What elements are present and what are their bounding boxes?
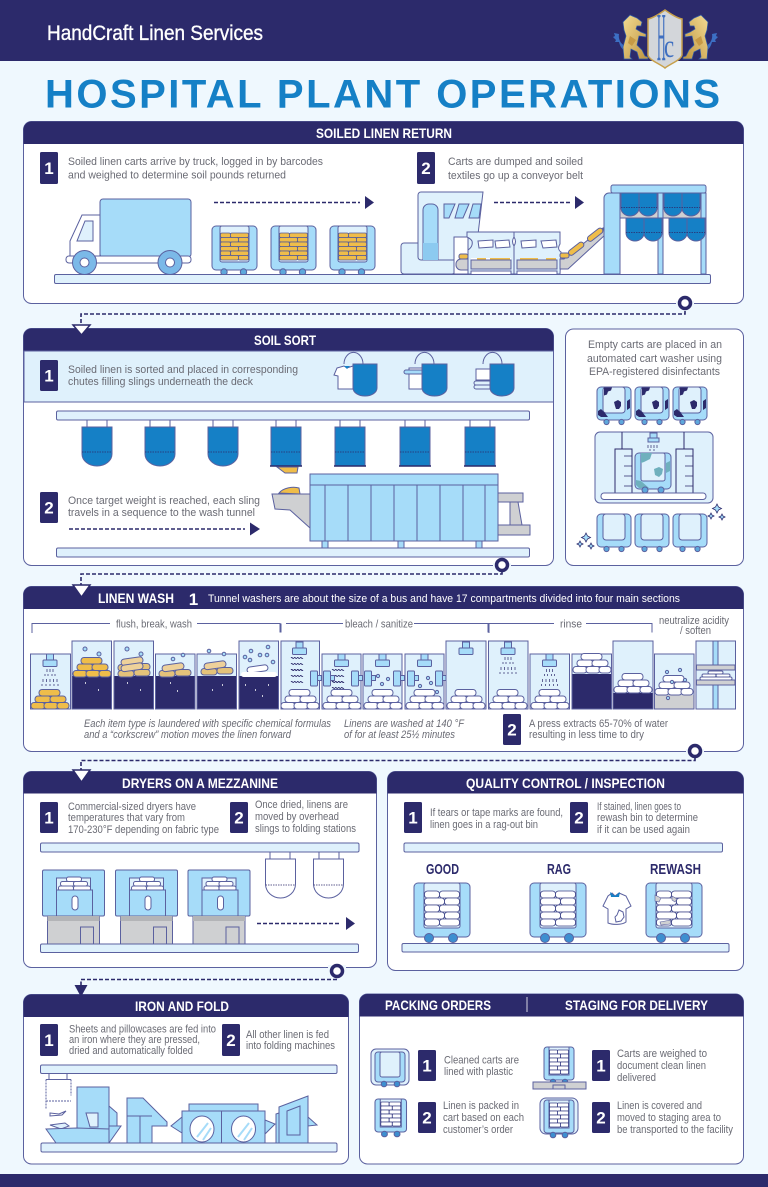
icon: cart washing machine	[595, 432, 713, 503]
step 1	[40, 152, 323, 184]
step 1: 1	[408, 808, 418, 828]
overhead rail	[40, 843, 359, 852]
description: EPA-registered disinfectants	[589, 366, 720, 378]
step 2: All other linen is fed	[246, 1029, 329, 1041]
staging step 2	[592, 1100, 733, 1136]
panel heading: 1	[189, 590, 198, 609]
footer band	[0, 1174, 768, 1187]
step 2: moved by overhead	[255, 811, 339, 823]
panel: dryers on a mezzanine	[24, 772, 376, 968]
panel: soil sort	[24, 328, 554, 566]
icon: soiled carts	[212, 226, 375, 275]
icon: sling with towel	[404, 352, 447, 396]
icon: lined cart	[371, 1049, 409, 1087]
icon: covered cart	[540, 1098, 578, 1138]
arrowhead into soil sort	[73, 325, 90, 335]
step 1: an iron where they are pressed,	[69, 1034, 200, 1046]
header band	[0, 0, 768, 61]
panel: iron and fold	[24, 994, 348, 1164]
icon: stained shirt	[603, 892, 631, 924]
arrowhead into iron and fold	[74, 985, 88, 997]
falling linen	[277, 467, 298, 473]
panel heading: DRYERS ON A MEZZANINE	[122, 775, 278, 791]
floor rail	[56, 548, 530, 557]
step 2: into folding machines	[246, 1040, 335, 1052]
icon: clean carts	[597, 514, 707, 552]
wash compartments: rinse	[488, 641, 653, 709]
step 1: and weighed to determine soil pounds returned	[68, 170, 286, 182]
icon: packed cart	[375, 1099, 406, 1137]
step 1: linen goes in a rag-out bin	[430, 819, 538, 831]
step 2: 2	[574, 808, 584, 828]
step 1 band: Soiled linen is sorted and placed in corresponding	[68, 364, 298, 376]
panel heading	[24, 586, 744, 609]
icon: sparkles	[577, 504, 725, 549]
floor rail	[402, 944, 729, 952]
icon: dirty carts	[597, 387, 707, 425]
panel heading: STAGING FOR DELIVERY	[565, 997, 709, 1013]
panel heading: SOILED LINEN RETURN	[316, 125, 452, 141]
icon: sling with shirt	[334, 352, 377, 396]
overhead rail	[404, 843, 722, 852]
logo: lions and crest: H	[657, 0, 666, 75]
icon: stacker	[276, 1096, 317, 1143]
panel heading	[24, 328, 554, 351]
connector: dryers to iron and fold	[81, 965, 346, 985]
panel: soiled linen return	[24, 122, 744, 304]
wash compartments: bleach, sanitize	[281, 641, 486, 709]
staging step 2: 2	[596, 1108, 606, 1128]
caption: formulas: and a “corkscrew” motion moves the linen forward	[84, 729, 292, 741]
panel: cart washer	[566, 329, 744, 566]
caption: formulas: Each item type is laundered with specific chemical formulas	[84, 718, 331, 730]
cart: rag	[530, 861, 586, 942]
step 2	[230, 799, 356, 835]
step 1: temperatures that vary from	[68, 812, 185, 824]
step 2	[222, 1024, 335, 1056]
panel heading	[24, 994, 348, 1017]
staging step 1: document clean linen	[617, 1060, 706, 1072]
staging step 2: moved to staging area to	[617, 1112, 721, 1124]
icon: ironer	[46, 1087, 121, 1143]
description: automated cart washer using	[587, 353, 722, 365]
step 1: Commercial-sized dryers have	[68, 801, 196, 813]
step 1 band: chutes filling slings underneath the deck	[68, 376, 253, 388]
icon: truck	[66, 199, 191, 274]
panel heading: Tunnel washers are about the size of a bus and have 17 compartments divided into four main sections	[208, 593, 680, 605]
step 2: rewash bin to determine	[597, 812, 698, 824]
brand name: HandCraft Linen Services	[47, 22, 263, 45]
panel heading: IRON AND FOLD	[135, 998, 229, 1014]
cart: good	[414, 861, 470, 942]
step 2: travels in a sequence to the wash tunnel	[68, 507, 255, 519]
panel heading	[24, 122, 744, 144]
packing step 2: 2	[422, 1108, 432, 1128]
hanging slings	[82, 420, 496, 466]
staging step 1: 1	[596, 1056, 606, 1076]
step 1	[404, 802, 563, 833]
staging step 2: be transported to the facility	[617, 1124, 733, 1136]
step 2: press	[503, 714, 668, 745]
panel: packing and staging	[360, 994, 744, 1164]
step 2: press: A press extracts 65-70% of water	[529, 718, 668, 730]
packing step 1: 1	[422, 1056, 432, 1076]
connector: soil sort to linen wash	[81, 560, 511, 586]
panel heading: PACKING ORDERS	[385, 997, 491, 1013]
connector: step 1 to soil sort	[81, 298, 694, 324]
caption: temperature: Linens are washed at 140 °F	[344, 718, 465, 730]
cart: rag: RAG	[547, 861, 571, 878]
staging step 1	[592, 1048, 707, 1084]
arrow	[494, 196, 584, 209]
packing step 1	[418, 1050, 519, 1081]
step 1: dried and automatically folded	[69, 1045, 193, 1057]
ground conveyor bar	[54, 274, 710, 284]
caption: temperature	[344, 718, 465, 741]
packing step 2: cart based on each	[443, 1112, 524, 1124]
step 2: textiles go up a conveyor belt	[448, 170, 583, 182]
section brackets: bleach / sanitize	[345, 618, 413, 630]
step 1 band	[24, 351, 554, 402]
description	[587, 339, 722, 378]
step 2: Once target weight is reached, each sling	[68, 495, 260, 507]
wash tunnel	[272, 474, 530, 548]
wash compartments: flush, break, wash	[30, 641, 278, 709]
title: HOSPITAL PLANT OPERATIONS	[45, 72, 720, 116]
step 2: 2	[234, 808, 244, 828]
step 1	[40, 801, 219, 836]
dumper and conveyor machine	[401, 192, 605, 274]
panel heading	[388, 772, 744, 794]
connector: linen wash to dryers	[81, 746, 704, 770]
icon: cart on scale	[533, 1047, 586, 1089]
step 2	[417, 152, 583, 184]
logo: lions and crest	[613, 0, 718, 75]
packing step 1: Cleaned carts are	[444, 1054, 519, 1066]
overhead rail	[40, 1065, 337, 1074]
floor rail	[40, 944, 358, 952]
cart: rewash	[646, 861, 702, 942]
cart: good: GOOD	[426, 861, 459, 878]
icon: folder with windows	[171, 1104, 275, 1143]
packing step 1: lined with plastic	[444, 1066, 513, 1078]
arrow	[214, 196, 374, 209]
step 2: press: resulting in less time to dry	[529, 729, 644, 741]
step 2: slings to folding stations	[255, 823, 356, 835]
step 1: Sheets and pillowcases are fed into	[69, 1024, 216, 1036]
logo: lions and crest: c	[664, 29, 674, 65]
step 2: press: 2	[507, 720, 517, 740]
staging step 1: Carts are weighed to	[617, 1048, 707, 1060]
step 2: Carts are dumped and soiled	[448, 156, 583, 168]
section brackets: flush, break, wash	[116, 618, 192, 630]
staging step 1: delivered	[617, 1072, 656, 1084]
staging step 2: Linen is covered and	[617, 1100, 702, 1112]
dryers	[42, 870, 250, 944]
step 1 band: 1	[44, 366, 54, 386]
icon: sling over ironer	[46, 1074, 71, 1129]
step 1: 1	[44, 159, 54, 178]
caption: temperature: of for at least 25½ minutes	[344, 729, 455, 741]
icon: overhead sling rack	[604, 185, 706, 274]
step 2: If stained, linen goes to	[597, 801, 681, 813]
packing step 2: Linen is packed in	[443, 1100, 519, 1112]
description: Empty carts are placed in an	[588, 339, 722, 351]
section brackets: neutralize acidity	[659, 615, 729, 627]
step 1	[40, 1024, 216, 1057]
arrow	[257, 917, 355, 930]
panel: linen wash	[24, 586, 744, 752]
overhead rail	[56, 411, 530, 420]
packing step 2: customer’s order	[443, 1124, 513, 1136]
step 1: 1	[44, 808, 54, 828]
caption: formulas	[84, 718, 331, 741]
cart: rewash: REWASH	[650, 861, 701, 878]
step 2: 2	[421, 159, 431, 178]
icon: folding machine	[127, 1098, 167, 1143]
floor rail	[41, 1143, 337, 1152]
step 2	[40, 492, 260, 523]
step 1: 1	[44, 1031, 54, 1050]
wash compartments: neutralize, press	[654, 641, 736, 709]
step 2: Once dried, linens are	[255, 799, 348, 811]
panel heading: LINEN WASH	[98, 590, 174, 606]
panel heading	[24, 772, 376, 794]
step 1: If tears or tape marks are found,	[430, 807, 563, 819]
empty slings	[266, 852, 344, 898]
panel heading	[360, 994, 744, 1016]
panel heading: QUALITY CONTROL / INSPECTION	[466, 775, 665, 791]
arrow	[69, 522, 260, 536]
section brackets	[32, 615, 729, 637]
panel: quality control	[388, 772, 744, 970]
arrowhead into linen wash	[73, 585, 90, 597]
arrowhead into dryers	[73, 770, 90, 782]
packing step 2	[418, 1100, 524, 1136]
section brackets: / soften	[680, 625, 711, 637]
panel heading: SOIL SORT	[254, 332, 316, 348]
step 2: 2	[226, 1031, 236, 1050]
icon: sling with stacked linen	[474, 352, 514, 396]
step 1: 170-230°F depending on fabric type	[68, 824, 219, 836]
section brackets: rinse	[560, 618, 582, 630]
step 2: if it can be used again	[597, 824, 690, 836]
step 1: Soiled linen carts arrive by truck, logged in by barcodes	[68, 156, 323, 168]
step 2	[570, 801, 698, 836]
step 2: 2	[44, 498, 54, 518]
